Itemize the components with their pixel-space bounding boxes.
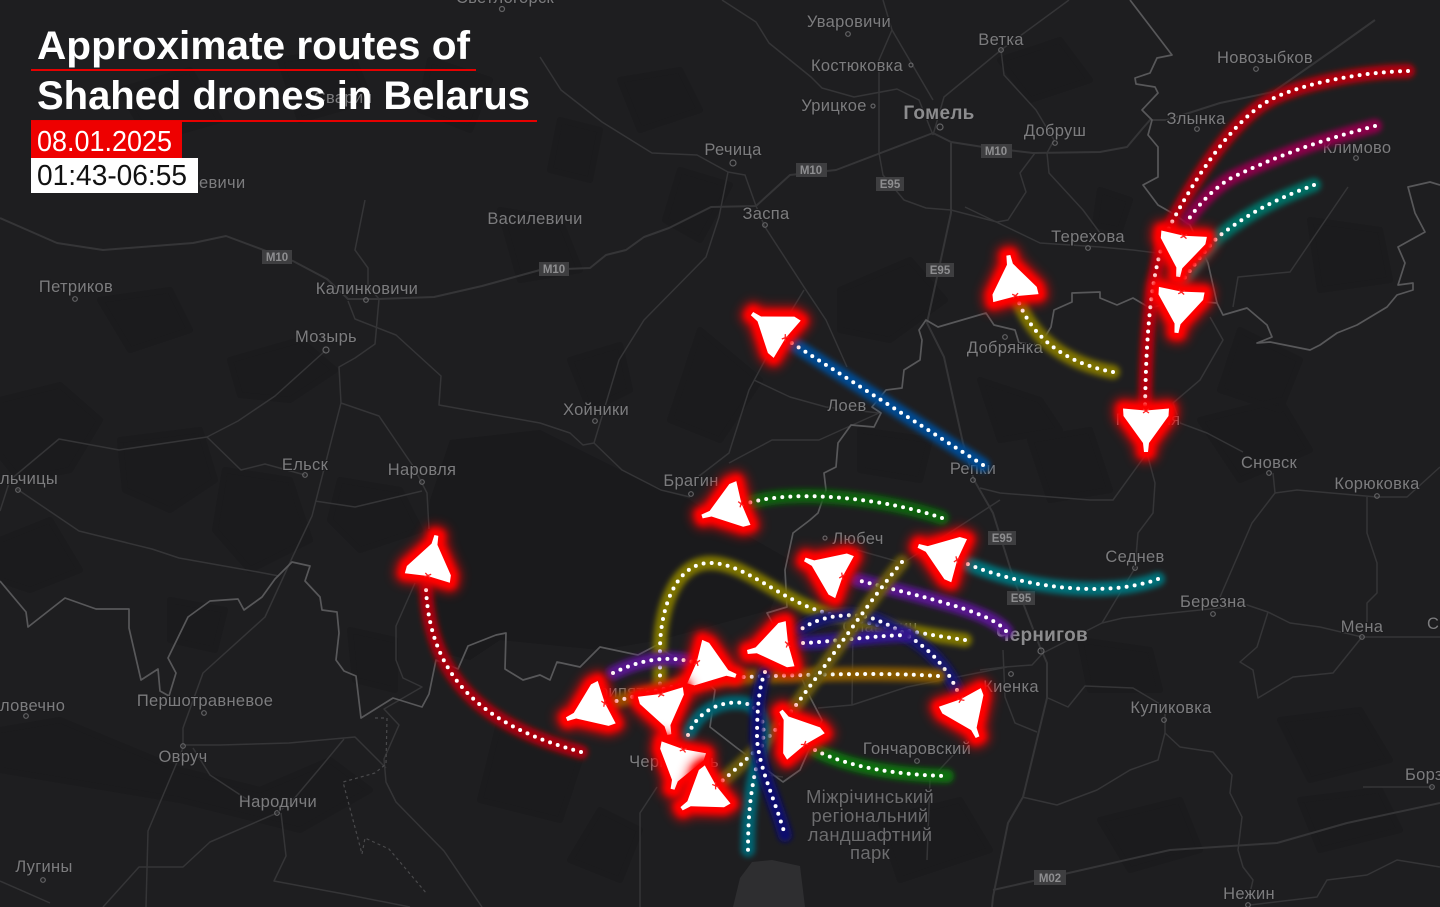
icon: drone Pripyat west: [558, 681, 616, 740]
badge E95: [988, 531, 1016, 545]
icon: drone west, Narovlia: [405, 531, 459, 583]
route: purple west: [613, 659, 693, 673]
icon: drone north-east 2: [1154, 287, 1205, 336]
place name labels: Лугины: [15, 858, 73, 876]
place name labels: Петриков: [39, 278, 113, 296]
place name labels: Мозырь: [295, 328, 357, 346]
badge E95: [1007, 591, 1035, 605]
date badge: 08.01.2025: [37, 126, 172, 158]
route: teal, north-east: [1183, 185, 1314, 280]
place name labels: льчицы: [0, 470, 58, 488]
place name labels: Климово: [1323, 139, 1391, 157]
place name labels: Ельск: [282, 456, 329, 474]
badge M10: M10: [543, 264, 565, 276]
badge M10: [796, 163, 827, 177]
road number badges: [262, 144, 1066, 885]
place name labels: Березна: [1180, 593, 1246, 611]
place name labels: Лоев: [827, 397, 867, 415]
route: yellow, to Dobrianka: [1018, 300, 1113, 372]
place name labels: Костюковка: [811, 57, 904, 75]
badge M10: M10: [985, 146, 1007, 158]
route: indigo short: [803, 635, 907, 643]
place name labels: Чернобыль: [629, 753, 719, 771]
place name labels: Добруш: [1024, 122, 1086, 140]
route: olive diagonal: [717, 562, 902, 785]
title block: [31, 24, 537, 193]
place name labels: Уваровичи: [807, 13, 891, 31]
place name labels: Гончаровский: [863, 740, 971, 758]
icon: drone north-east 1: [1155, 231, 1207, 280]
icon: drone Loev: [738, 295, 801, 358]
badge E95: E95: [992, 533, 1013, 545]
title line 1: Approximate routes of: [37, 24, 471, 68]
route: teal arc south: [688, 703, 764, 850]
place name labels: Городня: [1116, 411, 1180, 429]
icon: drone Horodnia: [1123, 408, 1169, 452]
route: orange long: [613, 674, 938, 702]
badge E95: E95: [1011, 593, 1032, 605]
badge M10: [981, 144, 1012, 158]
place name labels: Овруч: [159, 748, 207, 766]
place name labels: Чернигов: [996, 625, 1088, 646]
place name labels: Терехова: [1051, 228, 1125, 246]
nature park patch: [733, 860, 805, 907]
place name labels: Речица: [704, 141, 762, 159]
icon: drone Slavutych: [743, 621, 794, 675]
route: magenta, from Klimovo: [1188, 126, 1375, 220]
place name labels: Ветка: [978, 31, 1024, 49]
place name labels: Куликовка: [1130, 699, 1212, 717]
title underline 2: [31, 120, 537, 122]
place name labels: Сновск: [1241, 454, 1298, 472]
route: navy south: [757, 672, 785, 835]
icon: drone Honcharivske: [762, 698, 825, 760]
place name labels: Першотравневое: [137, 692, 273, 710]
place name labels: Заспа: [742, 205, 790, 223]
place name labels: Злынка: [1166, 110, 1226, 128]
badge E95: E95: [880, 179, 901, 191]
badge M10: [539, 262, 569, 276]
badge E95: [876, 177, 904, 191]
place name labels: Мена: [1341, 618, 1384, 636]
place name labels: регіональний: [811, 805, 929, 826]
icon: drone Pripyat south: [638, 687, 692, 739]
place name labels: Нежин: [1223, 885, 1275, 903]
icon: drone Chernobyl 1: [650, 741, 706, 795]
place name labels: Сварич: [314, 89, 372, 107]
icon: drone east of Liubech: [910, 524, 967, 582]
place name labels: Киенка: [983, 678, 1039, 696]
route: yellow loop: [660, 563, 965, 690]
place name labels: Новозыбков: [1217, 49, 1313, 67]
icon: drone Chernobyl 2: [669, 765, 731, 828]
drone routes: [426, 71, 1408, 850]
place name labels: парк: [850, 842, 891, 863]
badge M02: M02: [1039, 873, 1061, 885]
place name labels: ландшафтний: [808, 824, 932, 845]
badge M10: M10: [800, 165, 822, 177]
badge E95: [926, 263, 954, 277]
badge M02: [1034, 870, 1066, 885]
icon: drone Dobrianka: [986, 251, 1039, 302]
icon: drone Kiyenka: [939, 688, 999, 747]
route: green, to Bragin: [748, 496, 942, 518]
exclusion zone dark area: [420, 430, 790, 660]
icon: drone Bragin: [695, 481, 751, 538]
route: blue, Repki to Loev: [787, 340, 983, 465]
badge E95: E95: [930, 265, 951, 277]
route: purple, from Chernihiv: [857, 580, 1006, 631]
place name labels: Добрянка: [967, 339, 1044, 357]
place name labels: Хойники: [563, 401, 629, 419]
place name labels: Репки: [950, 460, 996, 478]
place name labels: Міжрічинський: [806, 786, 934, 807]
place name labels: Любеч: [832, 530, 884, 548]
place name labels: Корюковка: [1334, 475, 1420, 493]
drone icons: [405, 231, 1207, 828]
place name labels: евичи: [199, 174, 245, 192]
badge M10: [262, 250, 292, 264]
place name labels: Брагин: [663, 472, 719, 490]
route: green south-east: [815, 750, 947, 776]
place name labels: Славутич: [842, 618, 918, 636]
badge M10: M10: [266, 252, 288, 264]
time badge: 01:43-06:55: [37, 160, 187, 192]
route: red west: [426, 588, 581, 752]
icon: drone Pripyat east: [687, 640, 743, 698]
place name labels: Гомель: [903, 103, 975, 124]
icon: drone Liubech: [795, 538, 854, 598]
place name labels: Седнев: [1105, 548, 1165, 566]
route: navy arc: [800, 615, 957, 690]
place name labels: Припять: [587, 683, 653, 701]
title line 2: Shahed drones in Belarus: [37, 74, 530, 118]
place name labels: Народичи: [239, 793, 317, 811]
route: red, Novozybkov to Horodnia: [1145, 71, 1408, 410]
place name labels: Урицкое: [801, 97, 867, 115]
place name labels: Наровля: [388, 461, 456, 479]
place name labels: Калинковичи: [316, 280, 418, 298]
route: cyan, from Sedniv: [965, 563, 1158, 589]
place name labels: ловечно: [0, 697, 65, 715]
title underline 1: [31, 69, 476, 71]
place name labels: Василевичи: [487, 210, 583, 228]
